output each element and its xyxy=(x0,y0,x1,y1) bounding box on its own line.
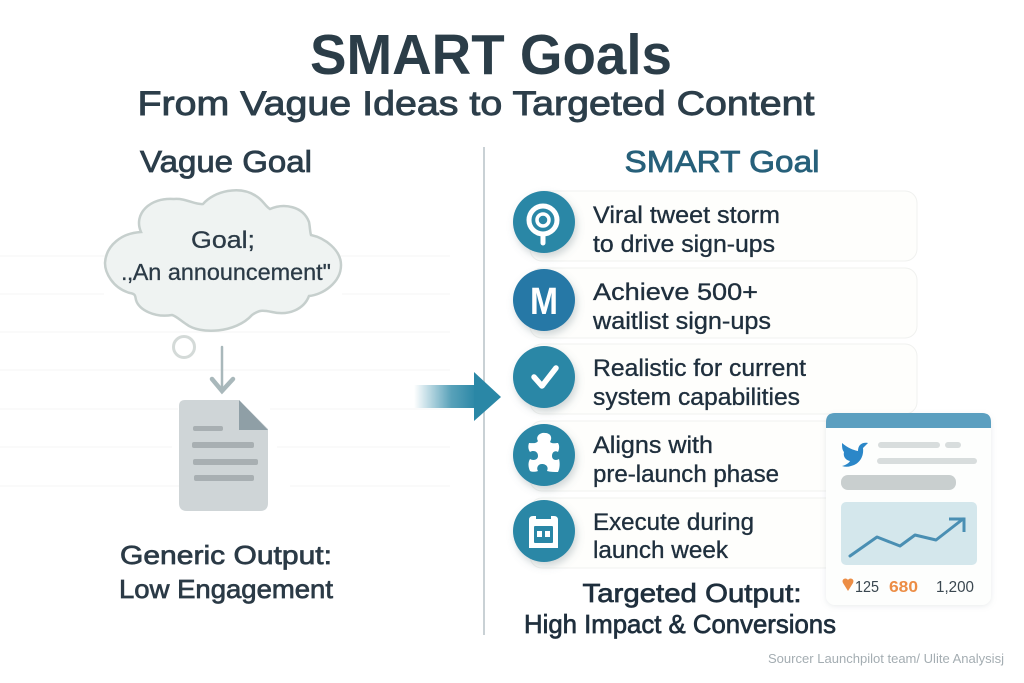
cloud text: Goal; xyxy=(191,227,255,254)
row: time-bound: launch week xyxy=(593,537,729,564)
row: specific: Viral tweet storm xyxy=(593,202,780,229)
caption: generic output: Low Engagement xyxy=(119,574,334,604)
thought cloud xyxy=(105,190,341,331)
icon: down arrow xyxy=(212,347,233,391)
tweet card xyxy=(826,413,991,605)
caption: generic output xyxy=(119,540,334,604)
line chart xyxy=(841,502,977,565)
row: aligned: pre-launch phase xyxy=(593,461,779,488)
thought bubble xyxy=(174,336,194,358)
panel: smart rows xyxy=(513,191,917,568)
engagement metrics xyxy=(843,579,974,596)
row: time-bound: Execute during xyxy=(593,509,754,536)
icon: puzzle piece xyxy=(513,424,575,486)
caption: targeted output: Targeted Output: xyxy=(582,578,802,608)
icon: document xyxy=(179,400,268,511)
icon: letter M: M xyxy=(530,281,558,323)
icon: target xyxy=(513,191,575,253)
subtitle: From Vague Ideas to Targeted Content xyxy=(138,85,815,123)
arrow: vague to smart xyxy=(414,372,501,421)
heading: vague goal: Vague Goal xyxy=(140,144,312,179)
caption: targeted output xyxy=(524,578,836,639)
row: specific xyxy=(513,191,917,261)
tweet placeholder lines xyxy=(841,442,977,490)
row: time-bound xyxy=(513,498,917,568)
engagement metrics: 680 xyxy=(889,579,918,596)
panel: vague goal xyxy=(105,144,341,604)
icon: calendar xyxy=(513,500,575,562)
row: measurable: waitlist sign-ups xyxy=(592,308,771,335)
caption: generic output: Generic Output: xyxy=(120,540,332,570)
thought cloud: .‚An announcement" xyxy=(121,259,331,285)
row: realistic: system capabilities xyxy=(593,384,800,411)
title: SMART Goals xyxy=(310,23,672,87)
card header xyxy=(826,413,991,428)
row: realistic xyxy=(513,344,917,414)
icon: letter M xyxy=(513,269,575,331)
engagement metrics: 1,200 xyxy=(936,579,974,596)
row: measurable xyxy=(513,268,917,338)
engagement metrics: 125 xyxy=(855,579,879,596)
center divider xyxy=(483,147,485,635)
caption: targeted output: High Impact & Conversions xyxy=(524,609,836,639)
row: aligned xyxy=(513,421,917,491)
row: measurable: Achieve 500+ xyxy=(593,279,758,306)
row: aligned: Aligns with xyxy=(593,432,713,459)
heading: smart goal: SMART Goal xyxy=(624,144,820,179)
source note: Sourcer Launchpilot team/ Ulite Analysisj xyxy=(768,652,1004,666)
icon: check mark xyxy=(513,346,575,408)
icon: bird xyxy=(842,443,868,467)
row: specific: to drive sign-ups xyxy=(593,231,775,258)
row: realistic: Realistic for current xyxy=(593,355,806,382)
